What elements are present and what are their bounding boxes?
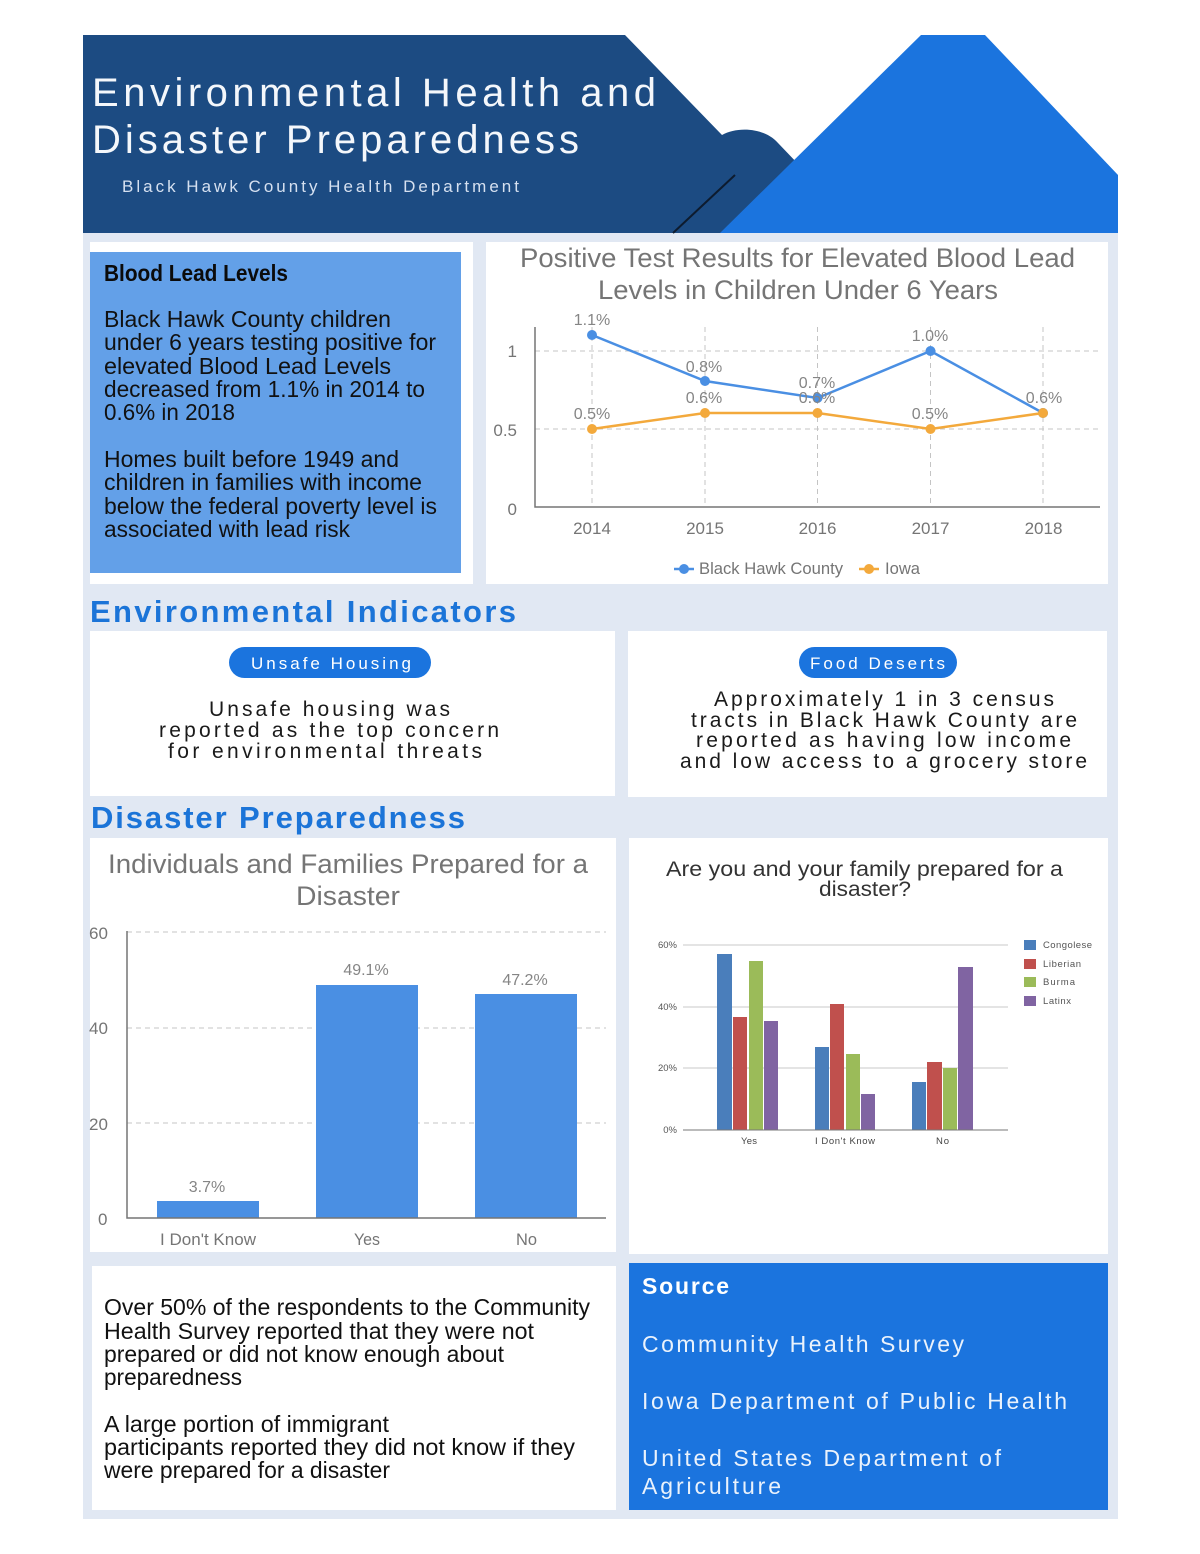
blood lead heading: Blood Lead Levels — [104, 260, 288, 286]
blood lead paragraph one: elevated Blood Lead Levels — [104, 353, 391, 379]
grouped chart x axis labels — [741, 1136, 949, 1147]
line chart y axis labels: 0.5 — [493, 421, 517, 440]
bar chart x axis labels: Yes — [354, 1230, 380, 1249]
line chart data labels: 0.7% — [799, 375, 835, 392]
bar chart data labels: 3.7% — [189, 1179, 225, 1196]
line chart data labels: 0.6% — [1026, 390, 1062, 407]
findings paragraph one: preparedness — [104, 1364, 242, 1390]
bar: I Don't Know — [157, 1201, 259, 1218]
header blue mountain — [720, 35, 1118, 233]
findings paragraph one: Over 50% of the respondents to the Community — [104, 1294, 590, 1320]
line chart title: Levels in Children Under 6 Years — [598, 275, 998, 305]
grouped chart legend: Latinx — [1043, 996, 1071, 1007]
series: Iowa — [587, 408, 1048, 434]
findings paragraph one — [104, 1294, 590, 1390]
findings paragraph two: A large portion of immigrant — [104, 1411, 390, 1437]
unsafe housing text: for environmental threats — [168, 740, 482, 763]
source list — [642, 1331, 1067, 1499]
grouped chart y axis labels: 20% — [658, 1063, 678, 1074]
bar chart y axis labels — [89, 924, 108, 1229]
blood lead paragraph two: children in families with income — [104, 469, 422, 495]
header black stroke — [673, 175, 735, 233]
grouped chart x axis labels: I Don't Know — [815, 1136, 875, 1147]
food deserts pill — [799, 647, 957, 678]
unsafe housing pill: Unsafe Housing — [251, 654, 411, 673]
bar chart title — [108, 849, 589, 911]
line chart x axis labels: 2015 — [686, 519, 724, 538]
findings paragraph one: Health Survey reported that they were not — [104, 1318, 535, 1344]
bars: Burma — [749, 961, 957, 1130]
line chart data labels: 1.0% — [912, 328, 948, 345]
line chart legend: Iowa — [885, 559, 921, 578]
bar: No — [475, 994, 577, 1218]
source list: Community Health Survey — [642, 1331, 964, 1357]
bar chart x axis labels: I Don't Know — [160, 1230, 257, 1249]
line chart data labels: 0.6% — [799, 390, 835, 407]
source list: Iowa Department of Public Health — [642, 1388, 1067, 1414]
bars: Liberian — [733, 1004, 942, 1130]
bar chart x axis labels — [160, 1230, 537, 1249]
line chart data labels: 0.6% — [686, 390, 722, 407]
header banner — [83, 35, 1118, 233]
blood lead paragraph one: Black Hawk County children — [104, 306, 391, 332]
line chart title: Positive Test Results for Elevated Blood Lead — [520, 243, 1075, 273]
line chart y axis labels: 0 — [508, 500, 517, 519]
heading: disaster preparedness: Disaster Preparedness — [91, 800, 465, 835]
grouped chart y axis labels — [658, 940, 678, 1136]
line chart x axis labels: 2017 — [912, 519, 949, 538]
bar chart data labels: 49.1% — [343, 962, 389, 979]
line chart data labels: 0.5% — [912, 406, 948, 423]
title — [92, 71, 656, 162]
findings paragraph one: prepared or did not know enough about — [104, 1341, 505, 1367]
bars: Latinx — [764, 967, 973, 1130]
grouped chart legend: Burma — [1043, 977, 1076, 988]
panel: blood lead levels — [90, 242, 473, 584]
findings paragraph two — [103, 1411, 575, 1483]
bar chart y axis labels: 40 — [89, 1019, 108, 1038]
blood lead paragraph two — [104, 446, 437, 542]
blood lead paragraph one: under 6 years testing positive for — [104, 329, 436, 355]
panel: immigrant preparedness chart — [629, 838, 1108, 1254]
grouped chart legend — [1024, 940, 1092, 1007]
bar chart x axis labels: No — [516, 1230, 537, 1249]
panel: survey findings text — [92, 1266, 616, 1510]
bar chart title: Disaster — [296, 881, 400, 911]
grouped chart title: Are you and your family prepared for a — [666, 858, 1063, 881]
blood lead paragraph one — [104, 306, 436, 425]
source list: Agriculture — [642, 1473, 781, 1499]
bar chart data labels — [189, 962, 548, 1196]
blood lead paragraph two: Homes built before 1949 and — [104, 446, 399, 472]
bar chart data labels: 47.2% — [502, 972, 548, 989]
blood lead paragraph two: below the federal poverty level is — [104, 493, 437, 519]
grouped chart title: disaster? — [819, 878, 911, 901]
panel: sources — [629, 1263, 1108, 1510]
line chart legend: Black Hawk County — [699, 559, 843, 578]
grouped chart legend: Liberian — [1043, 959, 1081, 970]
food deserts text — [680, 688, 1087, 773]
line chart data labels — [574, 312, 1062, 423]
grouped chart y axis labels: 0% — [663, 1125, 678, 1136]
findings paragraph two: participants reported they did not know if they — [104, 1434, 575, 1460]
food deserts text: tracts in Black Hawk County are — [691, 709, 1077, 732]
line chart x axis labels: 2014 — [573, 519, 611, 538]
grouped chart legend: Congolese — [1043, 940, 1092, 951]
food deserts pill: Food Deserts — [810, 654, 945, 673]
panel: blood lead line chart — [486, 242, 1108, 584]
grouped chart title — [666, 858, 1063, 901]
blood lead paragraph two: associated with lead risk — [104, 516, 350, 542]
line chart x axis labels: 2018 — [1025, 519, 1062, 538]
unsafe housing text — [159, 698, 499, 763]
line chart data labels: 0.5% — [574, 406, 610, 423]
bar: Yes — [316, 985, 418, 1218]
line chart y axis labels: 1 — [508, 342, 517, 361]
panel: prepared bar chart — [89, 838, 616, 1252]
heading: environmental indicators: Environmental Indicators — [90, 594, 516, 629]
blood lead paragraph one: 0.6% in 2018 — [104, 399, 235, 425]
bar chart title: Individuals and Families Prepared for a — [108, 849, 589, 879]
line chart data labels: 1.1% — [574, 312, 610, 329]
title: Disaster Preparedness — [92, 118, 579, 162]
food deserts text: and low access to a grocery store — [680, 750, 1087, 773]
unsafe housing text: reported as the top concern — [159, 719, 499, 742]
grouped chart y axis labels: 60% — [658, 940, 678, 951]
bar chart y axis labels: 0 — [98, 1210, 107, 1229]
bar chart y axis labels: 20 — [89, 1115, 108, 1134]
bar chart y axis labels: 60 — [89, 924, 108, 943]
title: Environmental Health and — [92, 71, 656, 115]
source list: United States Department of — [642, 1445, 1002, 1471]
series: Black Hawk County — [587, 330, 1048, 418]
header dark shape — [83, 35, 800, 233]
line chart x axis labels — [573, 519, 1062, 538]
grouped chart y axis labels: 40% — [658, 1002, 678, 1013]
line chart data labels: 0.8% — [686, 359, 722, 376]
blood lead paragraph one: decreased from 1.1% in 2014 to — [104, 376, 425, 402]
panel: unsafe housing — [90, 631, 615, 796]
unsafe housing text: Unsafe housing was — [209, 698, 450, 721]
unsafe housing pill — [229, 647, 431, 678]
subtitle: Black Hawk County Health Department — [122, 177, 519, 196]
grouped chart x axis labels: Yes — [741, 1136, 757, 1147]
line chart x axis labels: 2016 — [799, 519, 836, 538]
source heading: Source — [642, 1273, 729, 1299]
food deserts text: reported as having low income — [696, 729, 1071, 752]
panel: food deserts — [628, 631, 1107, 797]
line chart y axis labels — [493, 342, 517, 519]
grouped chart x axis labels: No — [936, 1136, 949, 1147]
line chart legend — [674, 559, 921, 578]
line chart title — [520, 243, 1075, 305]
bars: Congolese — [717, 954, 926, 1130]
findings paragraph two: were prepared for a disaster — [103, 1457, 390, 1483]
food deserts text: Approximately 1 in 3 census — [714, 688, 1054, 711]
